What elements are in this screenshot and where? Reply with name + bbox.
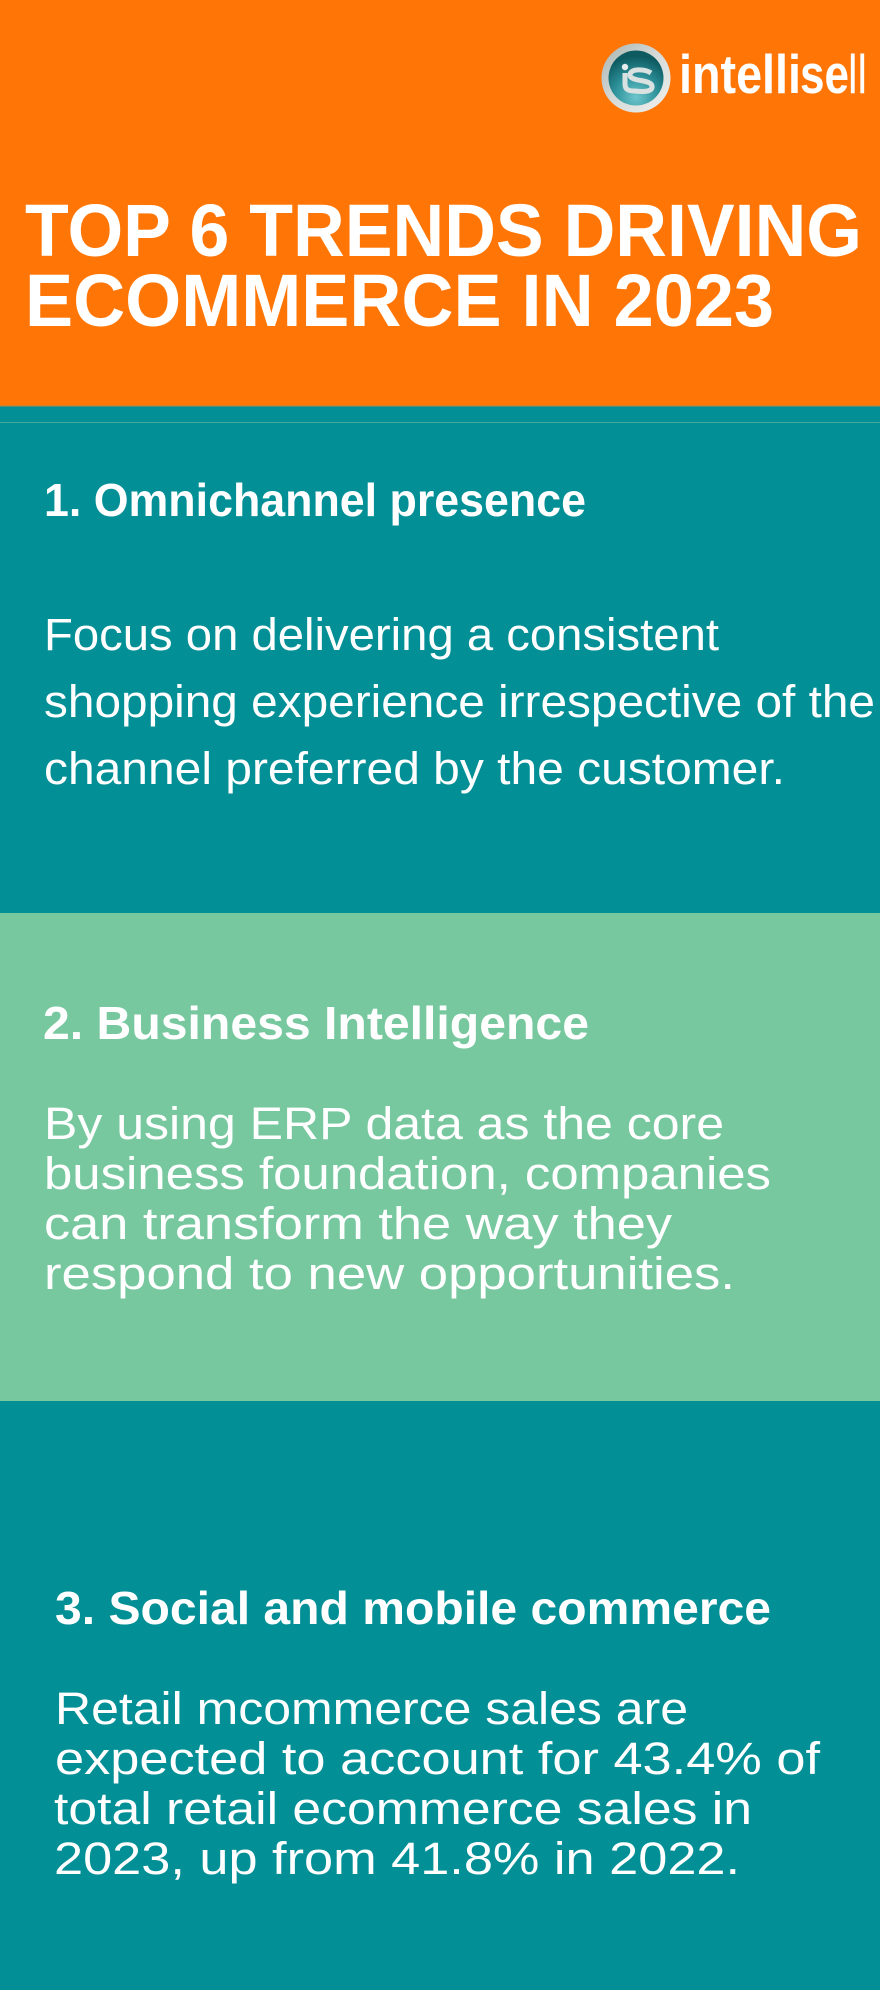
logo wordmark: ll	[848, 43, 867, 105]
panel: orange header	[0, 0, 880, 406]
text block: trend 2 description: respond to new opportunities.	[44, 1248, 735, 1299]
text block: trend 1 description: Focus on delivering a consistent	[44, 609, 720, 660]
heading: trend 1: 1. Omnichannel presence	[44, 474, 586, 526]
text block: trend 3 description: Retail mcommerce sales are	[55, 1683, 688, 1734]
title: ECOMMERCE IN 2023	[25, 259, 774, 342]
text block: trend 2 description: business foundation, companies	[44, 1148, 771, 1199]
logo: intellisell	[602, 43, 867, 112]
text block: trend 1 description: shopping experience irrespective of the	[44, 676, 875, 727]
panel: 3. Social and mobile commerce	[0, 1401, 880, 1990]
logo wordmark: se	[800, 43, 849, 105]
text block: trend 3 description: 2023, up from 41.8% in 2022.	[54, 1833, 740, 1884]
heading: trend 3: 3. Social and mobile commerce	[55, 1582, 771, 1634]
title: TOP 6 TRENDS DRIVING	[25, 189, 862, 272]
text block: trend 2 description: By using ERP data as the core	[44, 1098, 724, 1149]
text block: trend 3 description: total retail ecommerce sales in	[54, 1783, 752, 1834]
panel: 2. Business Intelligence	[0, 913, 880, 1401]
text block: trend 1 description	[44, 609, 875, 794]
logo wordmark: intelli	[679, 43, 801, 105]
text block: trend 3 description	[54, 1683, 821, 1884]
panel: 1. Omnichannel presence	[0, 406, 880, 913]
heading: trend 2: 2. Business Intelligence	[43, 997, 589, 1049]
title	[25, 189, 862, 342]
icon: intellisell circular badge	[602, 44, 670, 112]
text block: trend 1 description: channel preferred by the customer.	[44, 743, 785, 794]
text block: trend 2 description: can transform the way they	[44, 1198, 673, 1249]
text block: trend 3 description: expected to account for 43.4% of	[55, 1733, 821, 1784]
text block: trend 2 description	[44, 1098, 771, 1299]
